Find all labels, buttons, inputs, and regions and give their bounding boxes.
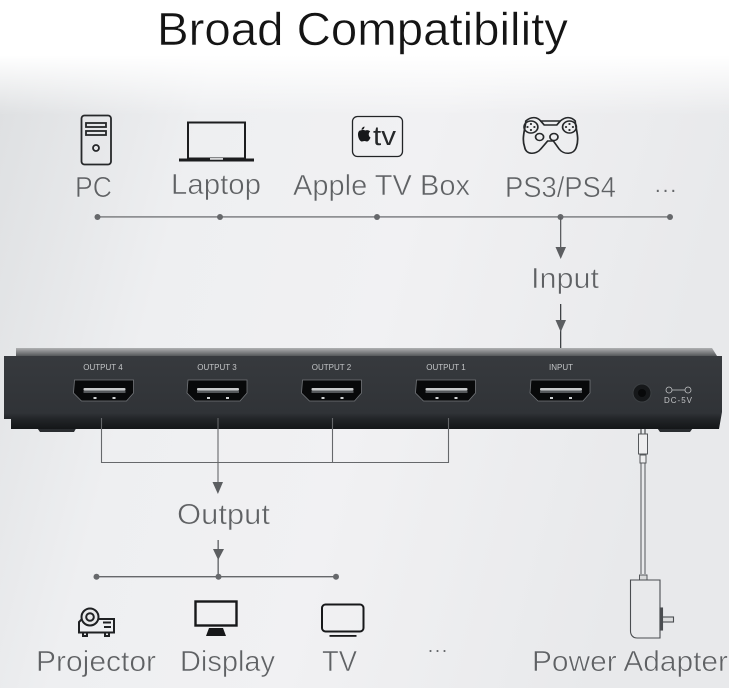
label: PS3/PS4: PS3/PS4 (505, 172, 616, 204)
power adapter (630, 580, 674, 638)
label: more input devices: ... (655, 175, 676, 197)
port: output 4 (74, 363, 134, 401)
input timeline (94, 214, 673, 220)
port: output 3: OUTPUT 3 (197, 363, 237, 372)
port: output 2: OUTPUT 2 (312, 363, 352, 372)
port: output 2 (302, 363, 362, 401)
DC-5V polarity mark (664, 387, 693, 405)
port: input: INPUT (549, 363, 573, 372)
arrow: output label to displays (213, 540, 224, 577)
arrow: bracket to output label (212, 482, 223, 494)
icon: game controller (523, 118, 578, 153)
port: output 3 (187, 363, 247, 401)
arrow: devices to input label (556, 217, 566, 259)
DC-5V polarity mark: DC-5V (664, 396, 693, 405)
label: Apple TV Box: Apple TV Box (293, 170, 470, 202)
label: TV: TV (322, 646, 358, 678)
icon: PC (82, 116, 111, 164)
arrow: input label to device (556, 304, 566, 358)
power jack (633, 384, 651, 402)
port: input (530, 363, 590, 401)
port: output 4: OUTPUT 4 (83, 363, 123, 372)
icon: TV (322, 604, 364, 637)
label: PC: PC (75, 172, 112, 204)
output bracket lines (102, 418, 448, 490)
device body (4, 356, 722, 429)
icon: laptop (179, 122, 254, 162)
power cable (638, 429, 648, 580)
label: Power Adapter: Power Adapter (532, 646, 728, 678)
label: Laptop: Laptop (171, 169, 261, 201)
port: output 1 (416, 363, 476, 401)
device top edge (16, 348, 717, 356)
icon: projector (79, 608, 114, 636)
device feet (35, 425, 695, 432)
label: more output devices: ... (428, 636, 447, 656)
icon: Apple TV (352, 116, 402, 156)
label: Display: Display (180, 646, 275, 678)
title: Broad Compatibility (157, 3, 568, 55)
icon: Apple TV: tv (373, 121, 397, 151)
port: output 1: OUTPUT 1 (426, 363, 466, 372)
label: Input: Input (531, 263, 599, 295)
icon: display (196, 602, 236, 636)
label: Projector: Projector (36, 646, 156, 678)
output timeline (94, 574, 339, 580)
label: Output: Output (177, 499, 270, 531)
HDMI switch device (4, 348, 722, 432)
